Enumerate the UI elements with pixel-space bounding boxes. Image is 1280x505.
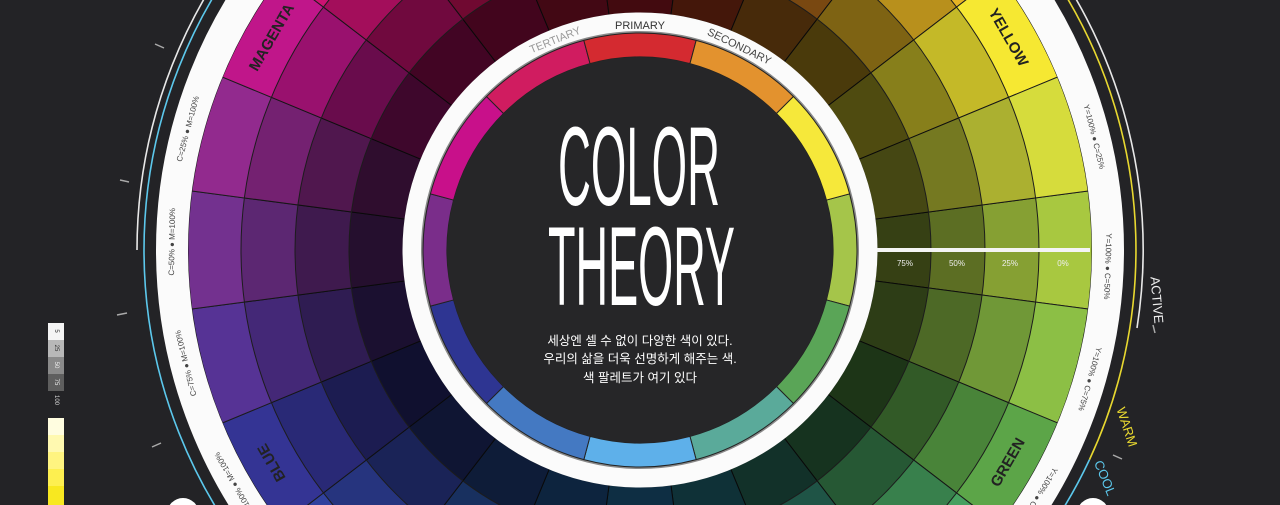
subtitle korean: 색 팔레트가 여기 있다 <box>583 371 697 385</box>
swatch: black scale: 75 <box>53 379 59 386</box>
inner ring labels: TERTIARY <box>528 25 583 56</box>
shade indicator line: 75% <box>897 259 913 268</box>
side labels: ACTIVE <box>1147 276 1167 324</box>
title <box>548 104 735 329</box>
band labels: Y=100% ● C=25% <box>1082 104 1106 170</box>
inner ring labels: SECONDARY <box>705 26 774 68</box>
band labels: Y=100% ● C=75% <box>1076 346 1103 412</box>
swatch: black scale <box>48 323 64 406</box>
segment labels: MAGENTA <box>246 1 298 74</box>
swatch: black scale: 100 <box>53 395 59 406</box>
band labels <box>167 0 1113 505</box>
shade indicator line: 50% <box>949 259 965 268</box>
white label band <box>172 0 1108 505</box>
side labels <box>1091 276 1167 498</box>
band labels: Y=100% ● C=50% <box>1102 233 1113 300</box>
segment labels: BLUE <box>254 441 290 484</box>
center dark circle <box>447 57 833 443</box>
shade indicator line: 0% <box>1057 259 1069 268</box>
swatch: black scale: 25 <box>53 345 59 352</box>
swatch: black scale: 5 <box>53 329 59 333</box>
segment labels <box>246 1 1032 490</box>
band labels: C=50% ● M=100% <box>167 208 177 276</box>
band labels: C=75% ● M=100% <box>173 329 198 397</box>
subtitle korean <box>543 334 737 385</box>
tick marks <box>117 44 1155 459</box>
band labels: C=25% ● M=100% <box>175 95 201 163</box>
outer color wheel <box>188 0 1092 505</box>
side labels: WARM <box>1114 405 1140 449</box>
text: COLOR <box>558 104 720 229</box>
segment labels: GREEN <box>987 435 1029 490</box>
text: THEORY <box>548 204 735 329</box>
subtitle korean: 우리의 삶을 더욱 선명하게 해주는 색. <box>543 352 737 366</box>
shade indicator line <box>877 248 1090 268</box>
inner color ring <box>422 32 858 468</box>
inner ring labels: PRIMARY <box>615 20 666 32</box>
swatch: yellow scale <box>48 418 64 505</box>
small white circles <box>167 498 1109 505</box>
segment labels: YELLOW <box>985 5 1032 70</box>
side labels: COOL <box>1091 458 1119 498</box>
inner ring labels <box>528 20 774 68</box>
subtitle korean: 세상엔 셀 수 없이 다양한 색이 있다. <box>547 334 733 348</box>
swatch: black scale: 50 <box>53 362 59 369</box>
outer arcs <box>137 0 1143 505</box>
white ring <box>413 23 867 477</box>
shade indicator line: 25% <box>1002 259 1018 268</box>
